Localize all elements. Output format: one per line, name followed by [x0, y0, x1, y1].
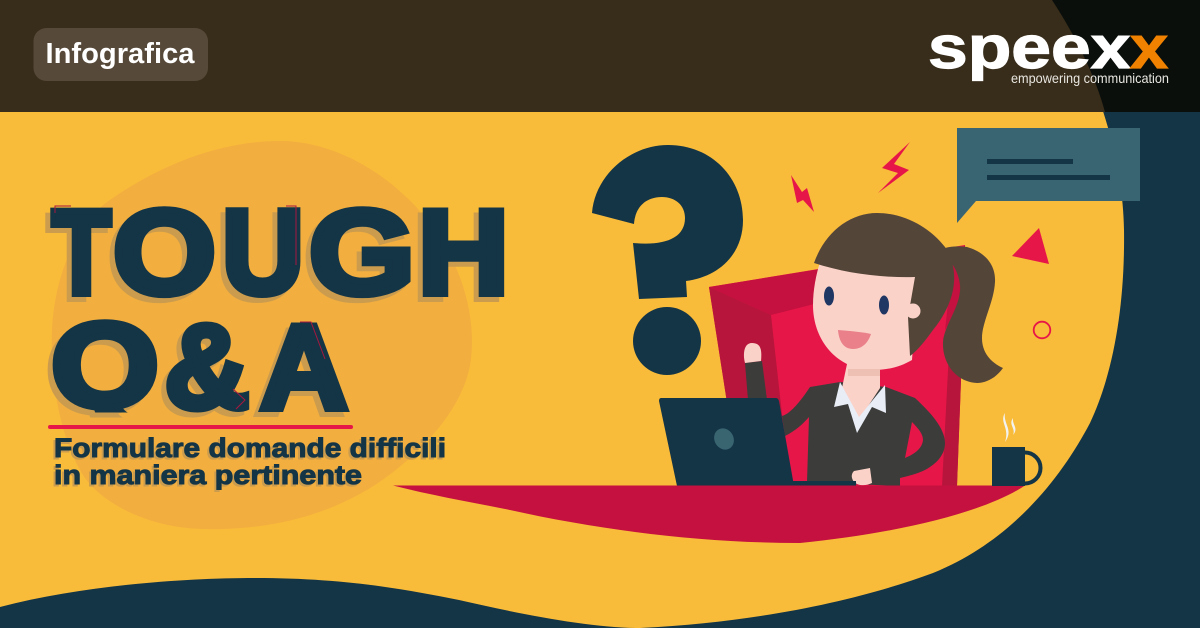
speech bubble: [957, 128, 1140, 223]
title: Q&A: [48, 319, 350, 418]
title accent lines: [55, 206, 325, 409]
ponytail shade: [945, 262, 960, 330]
eyes: [824, 286, 889, 314]
subtitle: [54, 433, 446, 490]
face: [813, 262, 918, 370]
underline: [48, 425, 353, 429]
blob behind title: [52, 141, 472, 529]
jacket: [782, 382, 945, 486]
raised arm: [745, 361, 767, 400]
neck: [842, 364, 880, 420]
logo: speexx: empowering communication: [1011, 70, 1169, 86]
logo: speexx: speex: [928, 13, 1131, 81]
character: [744, 213, 1003, 486]
subtitle: Formulare domande difficili: [54, 433, 446, 463]
decorative ring: [1034, 322, 1050, 338]
subtitle: in maniera pertinente: [54, 460, 362, 490]
ponytail: [943, 246, 1003, 383]
icon: question mark: [592, 145, 743, 375]
desk: [393, 486, 1025, 543]
collar: [834, 382, 886, 433]
title: Q&A: A: [260, 300, 348, 434]
title: TOUGH: [52, 186, 509, 320]
title: TOUGH: G: [309, 186, 415, 320]
hair: [814, 213, 954, 356]
title: Q&A: Q: [51, 298, 159, 432]
title: TOUGH: H: [418, 186, 509, 320]
title: TOUGH: U: [222, 186, 304, 320]
chair: [709, 245, 965, 486]
laptop: [659, 398, 856, 486]
title: TOUGH: T: [52, 186, 111, 320]
neck shadow: [848, 369, 880, 376]
mouth: [838, 330, 871, 349]
header band: [0, 0, 1200, 112]
coffee mug: [992, 413, 1040, 486]
badge: Infografica: [34, 28, 208, 81]
title: TOUGH: O: [113, 186, 216, 320]
raised hand: [744, 343, 761, 363]
decorative triangle: [1012, 228, 1049, 264]
logo: speexx: x: [1130, 14, 1168, 81]
title: Q&A: &: [164, 300, 250, 434]
badge: Infografica: Infografica: [46, 38, 195, 70]
lower hand: [852, 468, 872, 485]
icon: lightning bolts: [791, 142, 910, 212]
ear: [906, 304, 920, 318]
